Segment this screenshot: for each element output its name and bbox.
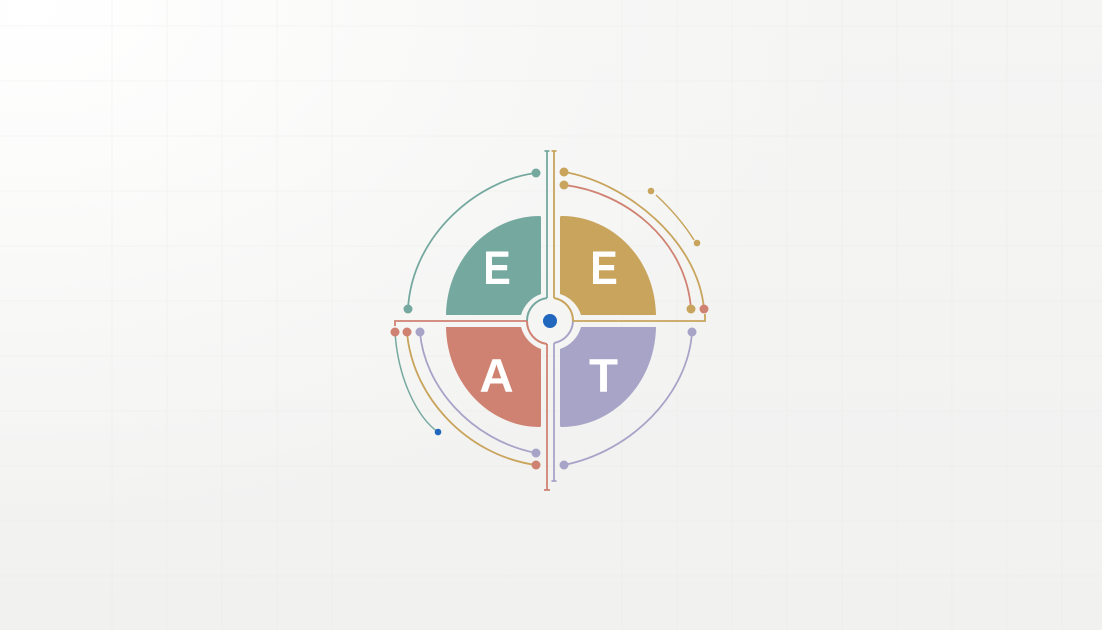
arc: teal small lower left bbox=[390, 328, 441, 435]
letter E: E bbox=[590, 242, 618, 295]
axis line: teal vertical bbox=[544, 151, 550, 298]
axis line: gold vertical and horizontal bbox=[552, 151, 705, 321]
arc: teal upper left bbox=[404, 168, 540, 314]
arc: gold outer upper right bbox=[560, 168, 708, 314]
panel: coral A quadrant bbox=[446, 327, 541, 427]
arc: gold lower left bbox=[402, 328, 540, 470]
arc: lavender lower right bbox=[560, 328, 696, 470]
arc: coral inner upper right bbox=[560, 180, 696, 314]
center hub bbox=[523, 294, 577, 348]
panel: gold E quadrant bbox=[560, 216, 656, 315]
arc: small gold upper right bbox=[648, 188, 700, 246]
arc: lavender lower left bbox=[416, 328, 540, 458]
panel: teal E quadrant bbox=[446, 216, 541, 315]
axis line: lavender vertical bbox=[552, 343, 556, 481]
axis line: coral horizontal and vertical bbox=[395, 321, 550, 490]
center blue dot bbox=[543, 314, 557, 328]
letter E: E bbox=[483, 242, 511, 295]
letter T: T bbox=[589, 350, 618, 403]
panel: lavender T quadrant bbox=[560, 327, 656, 427]
letter A: A bbox=[479, 350, 514, 403]
